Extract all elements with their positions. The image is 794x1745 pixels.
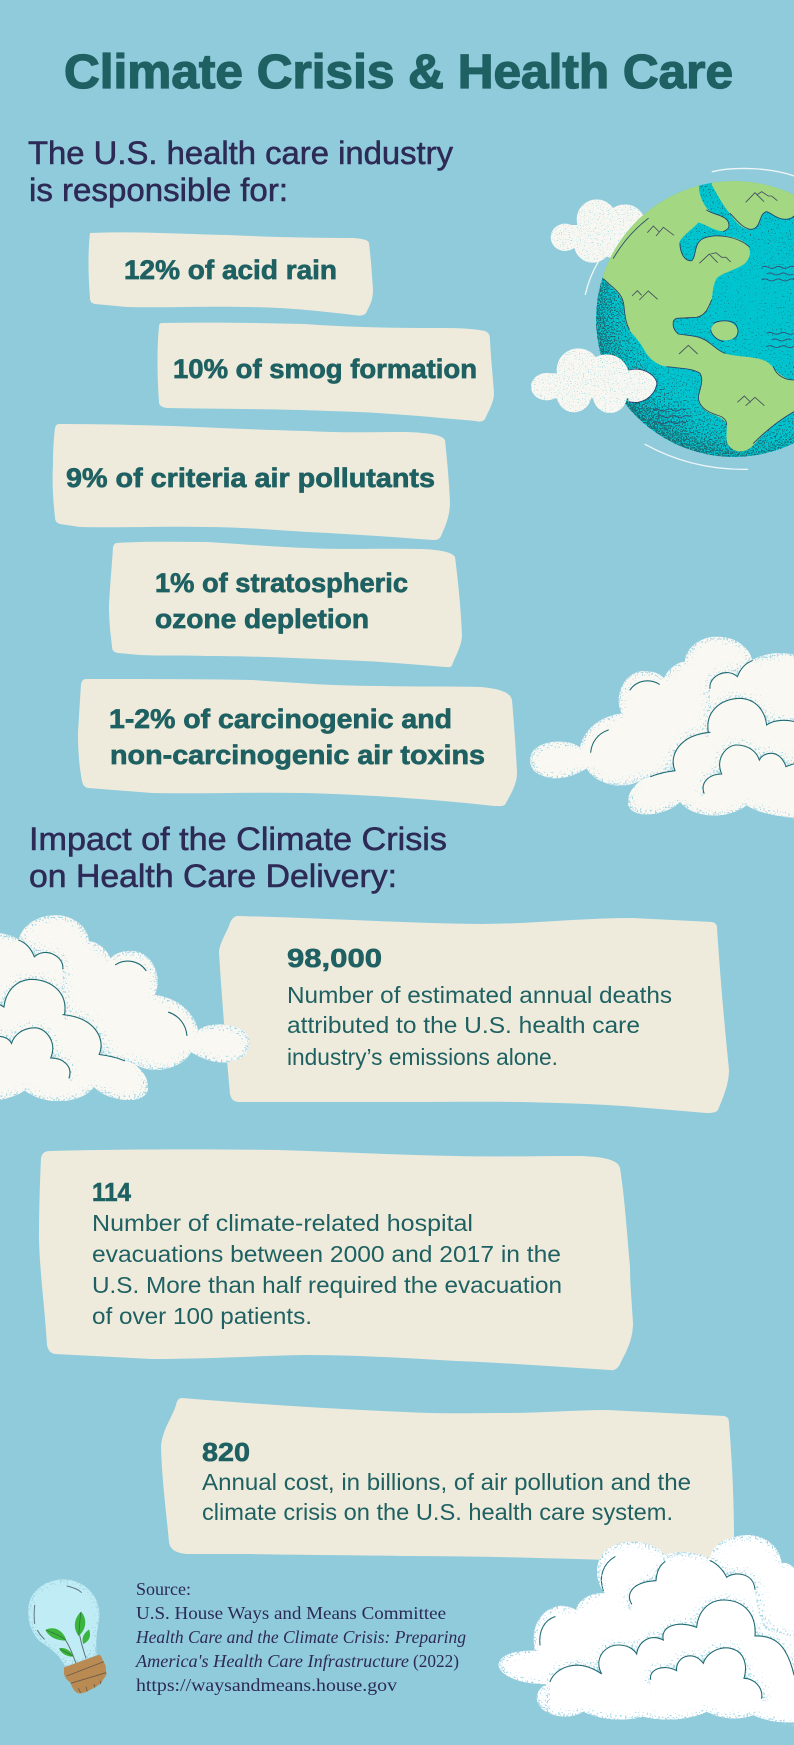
panel: air toxins <box>78 679 517 806</box>
panel: 114 evacuations: of over 100 patients. <box>92 1303 312 1329</box>
panel: 114 evacuations <box>39 1149 633 1370</box>
panel: ozone depletion <box>109 542 462 667</box>
earth limb beside cloud <box>613 218 648 258</box>
panel: 820 billions: climate crisis on the U.S. health care system. <box>202 1499 673 1525</box>
heading: industry responsibility: The U.S. health care industry <box>28 135 453 171</box>
panel: acid rain: 12% of acid rain <box>124 255 337 285</box>
heading: industry responsibility: is responsible for: <box>29 172 288 208</box>
heading: impact: Impact of the Climate Crisis <box>29 821 447 857</box>
illustration: bottom cloud <box>498 1535 794 1726</box>
panel: 98,000 deaths: 98,000 <box>287 943 382 973</box>
panel: 114 evacuations: U.S. More than half required the evacuation <box>92 1272 562 1298</box>
illustration: earth with clouds <box>531 168 794 469</box>
heading: impact: on Health Care Delivery: <box>29 858 397 894</box>
source text: Health Care and the Climate Crisis: Preparing <box>135 1627 466 1647</box>
icon: small cloud in front of earth <box>531 348 657 413</box>
illustration: left cloud <box>0 903 260 1128</box>
icon: globe <box>583 170 794 457</box>
panel: criteria air pollutants <box>53 424 450 540</box>
heading: industry responsibility <box>28 135 453 208</box>
panel: 114 evacuations: Number of climate-related hospital <box>92 1210 473 1236</box>
illustration: right cloud <box>520 625 794 842</box>
panel: air toxins: 1-2% of carcinogenic and <box>109 704 452 734</box>
heading: impact <box>29 821 447 894</box>
panel: smog: 10% of smog formation <box>173 354 477 384</box>
panel: 820 billions: 820 <box>202 1437 250 1467</box>
panel: 98,000 deaths: Number of estimated annual deaths <box>287 982 672 1008</box>
panel: 98,000 deaths: industry’s emissions alone. <box>287 1044 558 1070</box>
panel: air toxins: non-carcinogenic air toxins <box>110 740 485 770</box>
panel: ozone depletion: ozone depletion <box>155 604 369 634</box>
panel: 820 billions: Annual cost, in billions, of air pollution and the <box>202 1469 691 1495</box>
panel: 820 billions <box>161 1398 734 1566</box>
icon: small cloud behind earth <box>551 199 646 263</box>
panel: acid rain <box>88 232 373 316</box>
source text: U.S. House Ways and Means Committee <box>136 1603 446 1623</box>
panel: ozone depletion: 1% of stratospheric <box>155 568 408 598</box>
source text: (2022) <box>413 1651 459 1672</box>
panel: 114 evacuations: 114 <box>92 1177 131 1207</box>
panel: 98,000 deaths: attributed to the U.S. health care <box>287 1012 640 1038</box>
panel: smog <box>158 323 494 422</box>
icon: light bulb with sprout <box>28 1579 107 1693</box>
panel: 98,000 deaths <box>219 916 729 1113</box>
source text: https://waysandmeans.house.gov <box>136 1675 397 1695</box>
title: Climate Crisis & Health Care <box>64 46 733 99</box>
source text: Source: <box>136 1579 191 1599</box>
source text: America's Health Care Infrastructure <box>135 1651 409 1671</box>
panel: 114 evacuations: evacuations between 2000 and 2017 in the <box>92 1241 561 1267</box>
source text <box>135 1579 466 1695</box>
orbit lines <box>585 168 794 469</box>
panel: criteria air pollutants: 9% of criteria air pollutants <box>66 463 435 493</box>
